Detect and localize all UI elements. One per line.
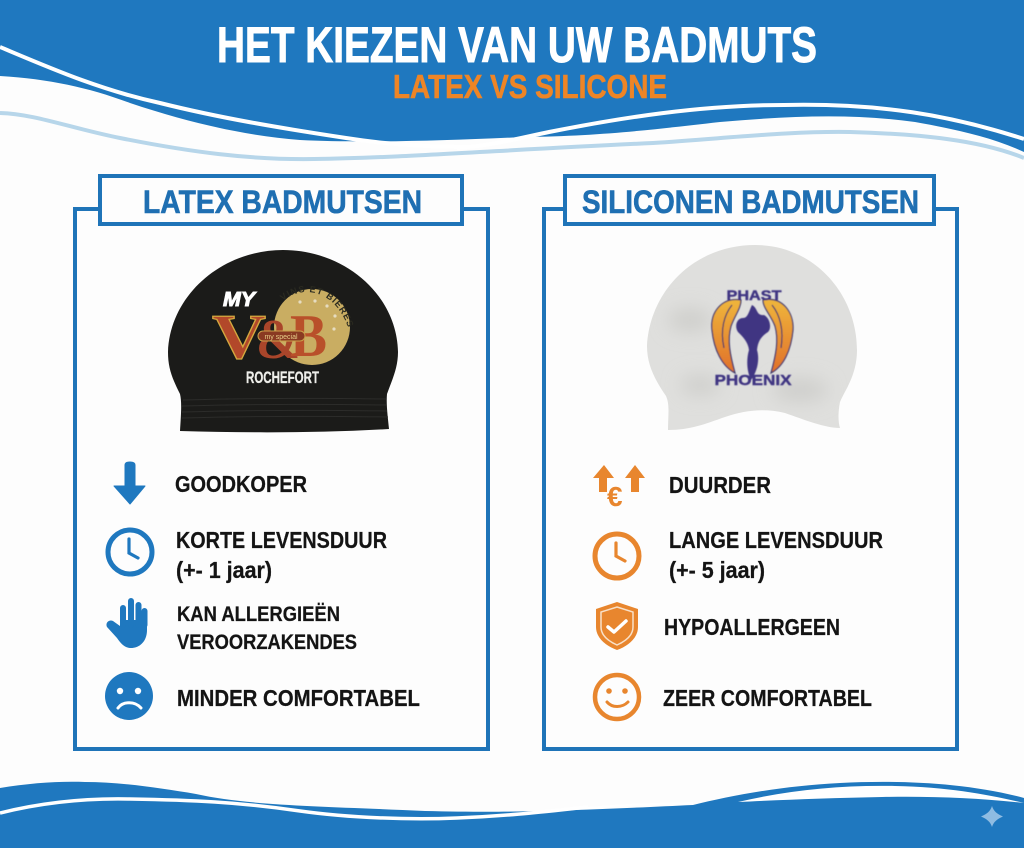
silicone row 1: more expensive: DUURDER (669, 472, 771, 498)
icon: hand (106, 601, 147, 648)
logo: V&B (212, 286, 353, 372)
white silicone cap (647, 245, 857, 430)
latex row 4: less comfortable (105, 672, 420, 720)
logo: V&B: my special (264, 334, 298, 341)
logo: V&B: B (290, 303, 327, 369)
icon: arrows with euro: € (607, 481, 623, 512)
icon: clock (595, 534, 639, 578)
latex row 1: cheap: GOODKOPER (175, 471, 307, 497)
latex row 2: short life: KORTE LEVENSDUUR (176, 527, 387, 553)
icon: arrows with euro (593, 465, 645, 512)
silicone row 2: long life: LANGE LEVENSDUUR (669, 527, 883, 553)
latex row 3: allergies: VEROORZAKENDES (177, 631, 357, 654)
panel: latex (75, 176, 488, 749)
latex row 4: less comfortable: MINDER COMFORTABEL (177, 685, 420, 711)
title: HET KIEZEN VAN UW BADMUTS (217, 17, 817, 73)
icon: smiley (595, 675, 639, 719)
heading: latex: LATEX BADMUTSEN (143, 184, 422, 220)
heading: silicone: SILICONEN BADMUTSEN (582, 184, 919, 220)
heading: latex (100, 176, 462, 224)
silicone row 3: hypoallergenic: HYPOALLERGEEN (664, 614, 840, 640)
latex row 3: allergies: KAN ALLERGIEËN (177, 603, 340, 626)
silicone row 2: long life (595, 527, 883, 583)
latex row 1: cheap (114, 462, 307, 504)
silicone row 4: very comfortable: ZEER COMFORTABEL (663, 685, 872, 711)
logo: V&B: & (256, 309, 300, 371)
subtitle: LATEX VS SILICONE (393, 68, 667, 105)
icon: sad face (105, 672, 153, 720)
icon: clock (108, 530, 152, 574)
black latex cap: ROCHEFORT (246, 368, 319, 387)
heading: silicone (565, 176, 934, 224)
icon: sparkle (981, 806, 1003, 827)
logo: V&B: VINS ET BIERES (280, 286, 353, 327)
silicone row 4: very comfortable (595, 675, 872, 719)
icon: shield (596, 602, 638, 650)
black latex cap (168, 250, 398, 432)
panel: silicone (544, 176, 957, 749)
phoenix logo (712, 287, 793, 389)
phoenix logo: PHOENIX (714, 372, 792, 389)
icon: arrow down (114, 462, 145, 504)
top wave header (0, 0, 1024, 159)
logo: V&B: V (212, 301, 266, 372)
logo: V&B: MY (223, 289, 257, 311)
latex row 2: short life (108, 527, 387, 583)
latex row 3: allergies (106, 601, 357, 654)
silicone row 1: more expensive (593, 465, 771, 512)
silicone row 2: long life: (+- 5 jaar) (669, 557, 765, 583)
bottom wave footer (0, 782, 1024, 848)
silicone row 3: hypoallergenic (596, 602, 840, 650)
phoenix logo: PHAST (726, 287, 782, 303)
latex row 2: short life: (+- 1 jaar) (176, 557, 272, 583)
